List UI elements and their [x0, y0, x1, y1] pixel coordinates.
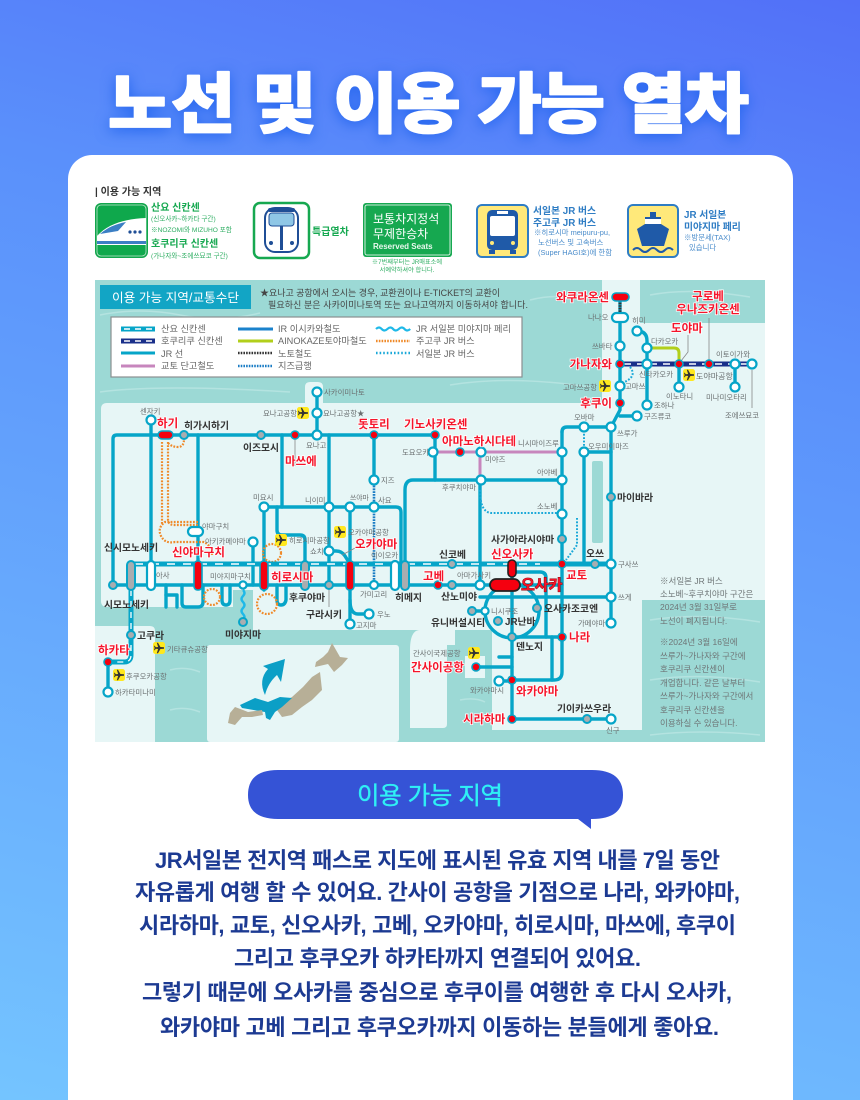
callout: usable area: 이용 가능 지역 — [357, 782, 503, 810]
station labels: minor: 지즈 — [381, 476, 395, 485]
legend section: usable trains — [95, 185, 741, 274]
stations: white — [104, 313, 756, 724]
body text — [135, 848, 740, 1040]
legend: Sanyo shinkansen: 산요 신칸센 — [161, 324, 206, 334]
Kyoto Tango railway — [435, 452, 562, 480]
station labels: major: 고쿠라 — [137, 630, 164, 642]
station labels: key stops: 와카야마 — [516, 684, 559, 698]
side notes: 쓰루가~가나자와 구간에 — [660, 651, 746, 661]
Chugoku region highlighted — [240, 697, 292, 720]
station labels: major: 덴노지 — [516, 641, 543, 653]
icon: reserved seats sign: Reserved Seats — [373, 242, 433, 251]
station labels: minor: 가메야마 — [578, 619, 605, 628]
map land — [101, 280, 765, 730]
legend: Noto railway: 노토철도 — [278, 349, 312, 359]
station labels: key stops: 나라 — [569, 630, 591, 644]
station labels: minor: 하카타미나미 — [115, 688, 156, 697]
Sanyo shinkansen — [131, 562, 611, 566]
station labels: minor: 아키카메야마 — [205, 537, 246, 546]
station labels: minor: 니시쿠조 — [491, 607, 518, 616]
side notes: 호쿠리쿠 신칸센을 — [660, 705, 725, 715]
text: JR bus — [533, 204, 612, 257]
leader lines — [295, 318, 752, 607]
legend: JR line: JR 선 — [161, 349, 183, 359]
legend: Chizu express — [238, 360, 312, 371]
station labels: major: 기이카쓰우라 — [557, 702, 611, 715]
side notes: 노선이 폐지됩니다. — [660, 616, 727, 626]
text: ferry: 미야지마 페리 — [684, 220, 741, 233]
stations — [104, 293, 756, 724]
station labels: minor: 아사 — [156, 571, 170, 580]
icon: shinkansen — [95, 203, 148, 258]
legend heading: | 이용 가능 지역 — [95, 185, 161, 198]
note: reserved seats: 서예약하셔야 합니다. — [380, 266, 435, 274]
station labels: key stops: 구로베 — [692, 290, 724, 303]
Hokuriku shinkansen — [620, 362, 752, 366]
station labels: major: 오쓰 — [586, 548, 604, 560]
text: shinkansen lines: (신오사카~하카타 구간) — [151, 214, 216, 223]
Kokura to Hakata shinkansen — [108, 590, 131, 662]
station labels: minor: 히미 — [632, 316, 646, 325]
inset: Japan map — [228, 643, 348, 725]
icon: reserved seats sign — [363, 203, 452, 257]
text: shinkansen lines — [151, 201, 232, 260]
station labels: minor: 고마쓰 — [625, 382, 646, 391]
text: limited express: 특급열차 — [312, 225, 349, 238]
station labels: minor: 고지마 — [356, 621, 377, 630]
station labels: minor: 쓰루가 — [617, 429, 638, 438]
text: JR bus: 주고쿠 JR 버스 — [533, 217, 596, 229]
station labels: minor: 요나고공항★ — [323, 409, 365, 418]
text: shinkansen lines: 산요 신칸센 — [151, 201, 200, 214]
station labels: minor: 사요 — [378, 496, 392, 505]
legend: JR line — [121, 349, 183, 359]
station labels: minor: 조에쓰묘코 — [725, 411, 759, 420]
station labels: minor: 소노베 — [537, 502, 558, 511]
station labels: minor: 쓰게 — [618, 593, 632, 602]
legend: IR Ishikawa railway: IR 이시카와철도 — [278, 323, 340, 334]
icon: ferry — [628, 205, 678, 257]
station labels: key stops: 가나자와 — [570, 357, 612, 371]
legend: Sanyo shinkansen — [121, 324, 206, 334]
body text: 그렇기 때문에 오사카를 중심으로 후쿠이를 여행한 후 다시 오사카, — [142, 980, 732, 1005]
station labels: minor: 조하나 — [654, 401, 675, 410]
side notes: ※서일본 JR 버스 — [660, 576, 723, 586]
station labels: minor: 니시마이즈루 — [518, 439, 559, 448]
station labels: minor: 야마구치 — [202, 522, 229, 531]
station labels: minor: 요나고 — [306, 441, 327, 450]
station labels: minor: 이이오카 — [371, 551, 398, 560]
station labels: major: JR난바 — [505, 615, 536, 628]
network lines — [108, 297, 752, 719]
text: ferry: JR 서일본 — [684, 208, 726, 221]
side notes: 개업합니다. 같은 날부터 — [660, 678, 745, 688]
station labels: key stops: 간사이공항 — [411, 660, 464, 674]
station labels: minor: 우노 — [377, 610, 391, 619]
station labels: key stops: 도야마 — [671, 321, 703, 335]
station labels: minor: 고마쓰공항 — [563, 383, 597, 392]
body text: 시라하마, 교토, 신오사카, 고베, 오카야마, 히로시마, 마쓰에, 후쿠이 — [139, 913, 736, 938]
station labels: minor: 니이미 — [305, 496, 325, 505]
station labels: minor: 신구 — [606, 726, 620, 735]
station labels: minor: 와카야마시 — [470, 686, 504, 695]
station labels: key stops: 고베 — [423, 570, 444, 583]
legend: Chizu express: 지즈급행 — [278, 360, 312, 371]
station labels: key stops: 아마노하시다테 — [442, 434, 516, 448]
legend: Noto railway — [238, 349, 312, 359]
station labels: minor: 쓰야마 — [350, 493, 370, 502]
station labels: minor: 미야즈 — [485, 455, 506, 464]
body text: 그리고 후쿠오카 하카타까지 연결되어 있어요. — [234, 946, 641, 971]
side notes: 쓰루가~가나자와 구간에서 — [660, 691, 753, 701]
station labels: minor: 나나오 — [588, 313, 609, 322]
station labels: minor: 가미고리 — [360, 590, 387, 599]
station labels: key stops: 교토 — [566, 569, 588, 582]
body text: JR서일본 전지역 패스로 지도에 표시된 유효 지역 내를 7일 동안 — [155, 848, 720, 873]
text: shinkansen lines: (가나자와~조에쓰묘코 구간) — [151, 251, 228, 260]
station labels: minor — [115, 313, 759, 735]
station labels: key stops: 오사카 — [521, 577, 563, 594]
station labels: minor: 이노타니 — [666, 392, 693, 401]
station labels: major: 오사카조코엔 — [544, 602, 598, 615]
station labels: minor: 후쿠오카공항 — [126, 672, 167, 681]
station labels: minor: 도야마공항 — [696, 371, 733, 381]
legend: West Japan bus — [376, 349, 475, 359]
station labels: minor: 미야지마구치 — [210, 572, 251, 581]
station labels: major: 마이바라 — [617, 491, 653, 504]
text: ferry — [684, 208, 741, 252]
station labels: key stops: 오카야마 — [355, 537, 398, 551]
West Japan bus routes — [480, 367, 633, 560]
legend: ferry: JR 서일본 미야지마 페리 — [416, 324, 511, 334]
text: ferry: ※방문세(TAX) — [684, 233, 731, 242]
station labels: key stops: 히로시마 — [271, 571, 314, 584]
map heading: 이용 가능 지역/교통수단 — [112, 291, 239, 305]
stations: major gray — [109, 431, 615, 723]
callout: usable area — [248, 770, 623, 829]
icon: limited express — [254, 203, 309, 258]
side notes: 이용하실 수 있습니다. — [660, 718, 737, 728]
station labels: major: 이즈모시 — [243, 442, 279, 454]
legend: Hokuriku shinkansen — [121, 336, 223, 346]
station labels: key stops: 돗토리 — [358, 418, 390, 431]
legend: Hokuriku shinkansen: 호쿠리쿠 신칸센 — [161, 336, 223, 346]
Shikoku and Kyushu — [228, 707, 263, 725]
station labels: major: 신시모노세키 — [104, 541, 158, 554]
note: reserved seats — [372, 258, 442, 274]
station labels: minor: 도요오카 — [402, 448, 429, 457]
panel: white card — [68, 155, 793, 1100]
legend: IR Ishikawa railway — [238, 323, 340, 334]
station labels: major — [104, 419, 653, 715]
map land: inset Japan area — [207, 645, 399, 742]
station labels: major: 후쿠야마 — [289, 591, 325, 604]
title: 노선 및 이용 가능 열차 — [108, 69, 749, 141]
arrow to Japan — [262, 659, 285, 695]
station labels: major: 신코베 — [439, 548, 466, 561]
map note: ★요나고 공항에서 오시는 경우, 교환권이나 E-TICKET의 교환이 — [260, 287, 500, 298]
station labels: minor: 사카이미나토 — [324, 388, 365, 397]
station labels: minor: 신타카오카 — [639, 370, 673, 379]
body text: 와카야마 고베 그리고 후쿠오카까지 이동하는 분들에게 좋아요. — [160, 1015, 719, 1040]
station labels: minor: 기타큐슈공항 — [167, 645, 208, 654]
station labels: minor: 후쿠치야마 — [442, 483, 476, 492]
station labels: minor: 아마가사키 — [457, 571, 491, 580]
side notes — [660, 576, 754, 728]
Miyajima ferry — [242, 590, 244, 620]
Honshu — [277, 672, 322, 717]
legend: Chugoku bus: 주고쿠 JR 버스 — [416, 336, 475, 346]
JR lines — [108, 297, 735, 719]
station labels: minor: 구즈류코 — [644, 412, 671, 421]
station labels: minor: 오우미이마즈 — [588, 442, 629, 451]
station labels: minor: 센자키 — [140, 407, 160, 416]
station labels: key stops: 우나즈키온센 — [676, 302, 740, 316]
station labels: minor: 쓰바타 — [592, 342, 613, 351]
station labels: major: 산노미야 — [441, 590, 477, 603]
station labels: major: 히가시하기 — [184, 419, 229, 432]
text: shinkansen lines: 호쿠리쿠 신칸센 — [151, 237, 218, 250]
legend: Ainokaze — [238, 336, 367, 346]
side notes: ※2024년 3월 16일에 — [660, 637, 738, 647]
station labels: key stops: 시라하마 — [463, 713, 506, 726]
station labels: major: 사가아라시야마 — [491, 533, 554, 546]
text: ferry: 있습니다 — [689, 243, 716, 252]
note: reserved seats: ※7번째부터는 JR매표소에 — [372, 258, 442, 266]
station labels: key stops: 기노사키온센 — [404, 417, 467, 431]
text: JR bus: 서일본 JR 버스 — [533, 204, 596, 217]
map note: 필요하신 분은 사카이미나토역 또는 요나고역까지 이동하셔야 합니다. — [268, 299, 528, 310]
text: JR bus: 노선버스 및 고속버스 — [538, 238, 604, 247]
body text: 자유롭게 여행 할 수 있어요. 간사이 공항을 기점으로 나라, 와카야마, — [135, 880, 740, 905]
station labels: major: 시모노세키 — [104, 598, 149, 611]
map legend box — [111, 317, 522, 377]
station labels: key stops: 신오사카 — [491, 547, 534, 561]
legend: Ainokaze: AINOKAZE토야마철도 — [278, 336, 367, 346]
icon: bus — [477, 205, 528, 257]
side notes: 호쿠리쿠 신칸센이 — [660, 664, 725, 674]
station labels: major: 미야지마 — [225, 628, 261, 641]
station labels: minor: 미나미오타리 — [706, 393, 747, 402]
station labels: key stops: 하카타 — [98, 643, 130, 657]
station labels: minor: 오카야마공항 — [348, 528, 389, 537]
legend: West Japan bus: 서일본 JR 버스 — [416, 349, 475, 359]
station labels: minor: 쇼치 — [310, 547, 324, 556]
legend: Kyoto Tango railway — [121, 361, 214, 371]
map note — [260, 287, 528, 310]
text: JR bus: ※히로시마 meipuru-pu, — [534, 228, 610, 237]
side notes: 소노베~후쿠치야마 구간은 — [660, 589, 754, 599]
map land: Kansai — [410, 630, 455, 728]
station labels: minor: 구사쓰 — [618, 560, 639, 569]
station labels: minor: 히로시마공항 — [289, 536, 330, 545]
stations: key red — [104, 293, 713, 723]
station labels: minor: 간사이국제공항 — [413, 649, 461, 658]
station labels: key stops — [98, 290, 740, 726]
Noto railway — [618, 300, 622, 315]
map land: Kansai airport island — [465, 656, 485, 678]
station labels: minor: 요나고공항 — [263, 409, 297, 418]
station labels: minor: 이토이가와 — [716, 350, 750, 359]
station labels: minor: 미요시 — [253, 493, 273, 502]
route map — [95, 280, 765, 742]
Ainokaze line — [647, 348, 679, 364]
Lake Biwa — [592, 461, 603, 543]
map sea background — [95, 280, 765, 742]
station labels: key stops: 신야마구치 — [172, 545, 225, 559]
station labels: major: 구라시키 — [306, 608, 342, 621]
airport icons — [113, 369, 695, 681]
station labels: key stops: 후쿠이 — [580, 396, 612, 410]
Chugoku bus routes — [160, 439, 281, 614]
station labels: major: 유니버설시티 — [431, 617, 485, 629]
Hokkaido — [315, 643, 348, 672]
station labels: minor: 오바마 — [574, 413, 595, 422]
legend: Kyoto Tango railway: 교토 단고철도 — [161, 361, 214, 371]
side notes: 2024년 3월 31일부로 — [660, 602, 737, 612]
legend: Chugoku bus — [376, 336, 475, 346]
text: JR bus: (Super HAGI호)에 한함 — [538, 248, 612, 257]
map heading — [100, 285, 251, 309]
station labels: minor: 다카오카 — [651, 337, 678, 346]
map land: Kyushu — [95, 626, 155, 742]
icon: reserved seats sign: 무제한승차 — [373, 227, 428, 241]
station labels: key stops: 하기 — [157, 416, 178, 430]
station labels: key stops: 와쿠라온센 — [556, 291, 609, 304]
icon: reserved seats sign: 보통차지정석 — [373, 212, 439, 226]
text: shinkansen lines: ※NOZOMI와 MIZUHO 포함 — [151, 225, 232, 234]
station labels: major: 히메지 — [395, 591, 422, 604]
station labels: key stops: 마쓰에 — [285, 455, 317, 468]
Chizu express — [373, 480, 375, 585]
station labels: minor: 아야베 — [537, 468, 558, 477]
